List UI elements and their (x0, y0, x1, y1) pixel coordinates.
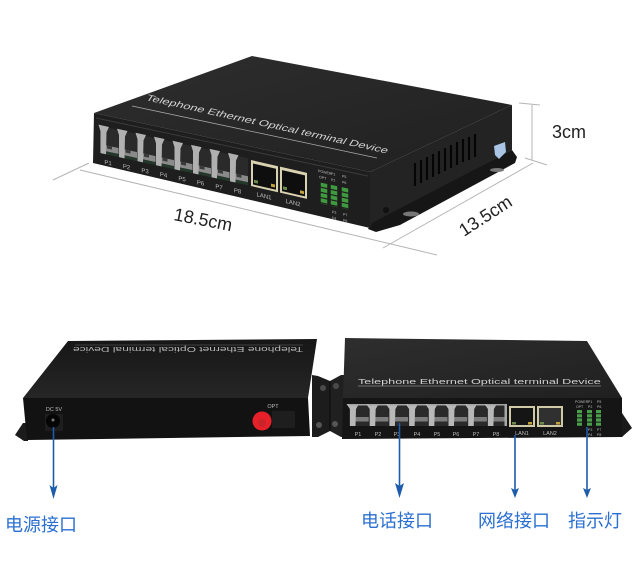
product name on top face: Telephone Ethernet Optical terminal Device (144, 94, 390, 156)
LAN ports (251, 160, 307, 210)
indicator LEDs: P1 (331, 172, 335, 177)
label: telephone port: 电话接口 (361, 511, 433, 531)
port labels (355, 431, 557, 438)
port labels: P1 (355, 432, 361, 438)
device right side (370, 105, 512, 228)
front panel (342, 398, 622, 439)
indicator LEDs (575, 400, 601, 437)
top device: isometric product photo (93, 56, 517, 232)
icon: blue dip switch (494, 142, 506, 159)
telephone ports (346, 404, 507, 426)
device mounting flange (368, 150, 517, 232)
port labels: P5 (434, 432, 440, 438)
power jack (45, 414, 63, 431)
indicator LEDs: P5 (597, 400, 601, 404)
indicator LEDs: P4 (332, 216, 336, 221)
DC 5V label: DC 5V (46, 407, 62, 413)
height label: 3cm (552, 122, 586, 142)
left flange tip (15, 423, 28, 441)
indicator LEDs: P5 (342, 174, 346, 179)
fibre connector (252, 411, 295, 430)
telephone ports P1-P8: P2 (123, 164, 131, 172)
label: power port: 电源接口 (5, 515, 77, 535)
telephone ports P1-P8: P1 (104, 160, 112, 168)
product name: Telephone Ethernet Optical terminal Device (358, 379, 601, 386)
indicator LEDs: P8 (597, 433, 601, 437)
telephone ports P1-P8: P4 (160, 172, 168, 180)
arrow: network port (511, 435, 519, 498)
right flange tip (622, 413, 632, 437)
label: indicator lights: 指示灯 (568, 511, 622, 531)
port labels: P6 (453, 432, 459, 438)
indicator LEDs: OPT (319, 175, 327, 181)
indicator LEDs: P2 (331, 178, 335, 183)
width label: 18.5cm (172, 204, 234, 235)
indicator LEDs: P3 (588, 428, 592, 432)
arrow: power port (50, 427, 58, 499)
indicator LEDs: POWER (575, 400, 589, 404)
device top face (94, 56, 512, 172)
indicator LEDs (318, 169, 347, 223)
indicator LEDs: P3 (332, 210, 336, 215)
arrow: indicators (583, 427, 591, 498)
device front face (93, 113, 370, 228)
indicator LEDs: P7 (343, 212, 347, 217)
indicator LEDs: P8 (343, 218, 347, 223)
indicator LEDs: P6 (597, 405, 601, 409)
bottom left device: rear view (15, 339, 317, 441)
port labels: P2 (375, 432, 381, 438)
LAN ports: LAN2 (286, 199, 301, 208)
indicator LEDs: P4 (588, 433, 592, 437)
joined flanges between devices (312, 375, 346, 437)
arrow: telephone port (395, 423, 404, 498)
rear panel (23, 398, 310, 440)
indicator LEDs: POWER (318, 169, 332, 176)
rear top face (23, 339, 317, 398)
indicator LEDs: OPT (576, 405, 584, 409)
port labels: LAN1 (515, 431, 529, 437)
dimension lines (53, 103, 547, 255)
telephone ports P1-P8: P8 (234, 188, 242, 196)
front view top face (343, 338, 622, 398)
telephone ports P1-P8 (98, 125, 248, 197)
telephone ports P1-P8: P5 (178, 176, 186, 184)
telephone ports P1-P8: P6 (197, 180, 205, 188)
label: network port: 网络接口 (478, 511, 550, 531)
LAN ports (509, 406, 563, 427)
depth label: 13.5cm (455, 191, 516, 240)
port labels: LAN2 (543, 431, 557, 437)
port labels: P4 (414, 432, 420, 438)
indicator LEDs: P7 (597, 428, 601, 432)
bottom right device: front view (342, 338, 632, 439)
product name upside down: Telephone Ethernet Optical terminal Device (72, 345, 303, 353)
indicator LEDs: P1 (588, 400, 592, 404)
telephone ports P1-P8: P7 (215, 184, 223, 192)
port labels: P7 (473, 432, 479, 438)
telephone ports P1-P8: P3 (141, 168, 149, 176)
OPT label: OPT (267, 404, 279, 410)
LAN ports: LAN1 (257, 192, 272, 202)
indicator LEDs: P6 (342, 180, 346, 185)
indicator LEDs: P2 (588, 405, 592, 409)
port labels: P3 (394, 432, 400, 438)
port labels: P8 (493, 432, 499, 438)
